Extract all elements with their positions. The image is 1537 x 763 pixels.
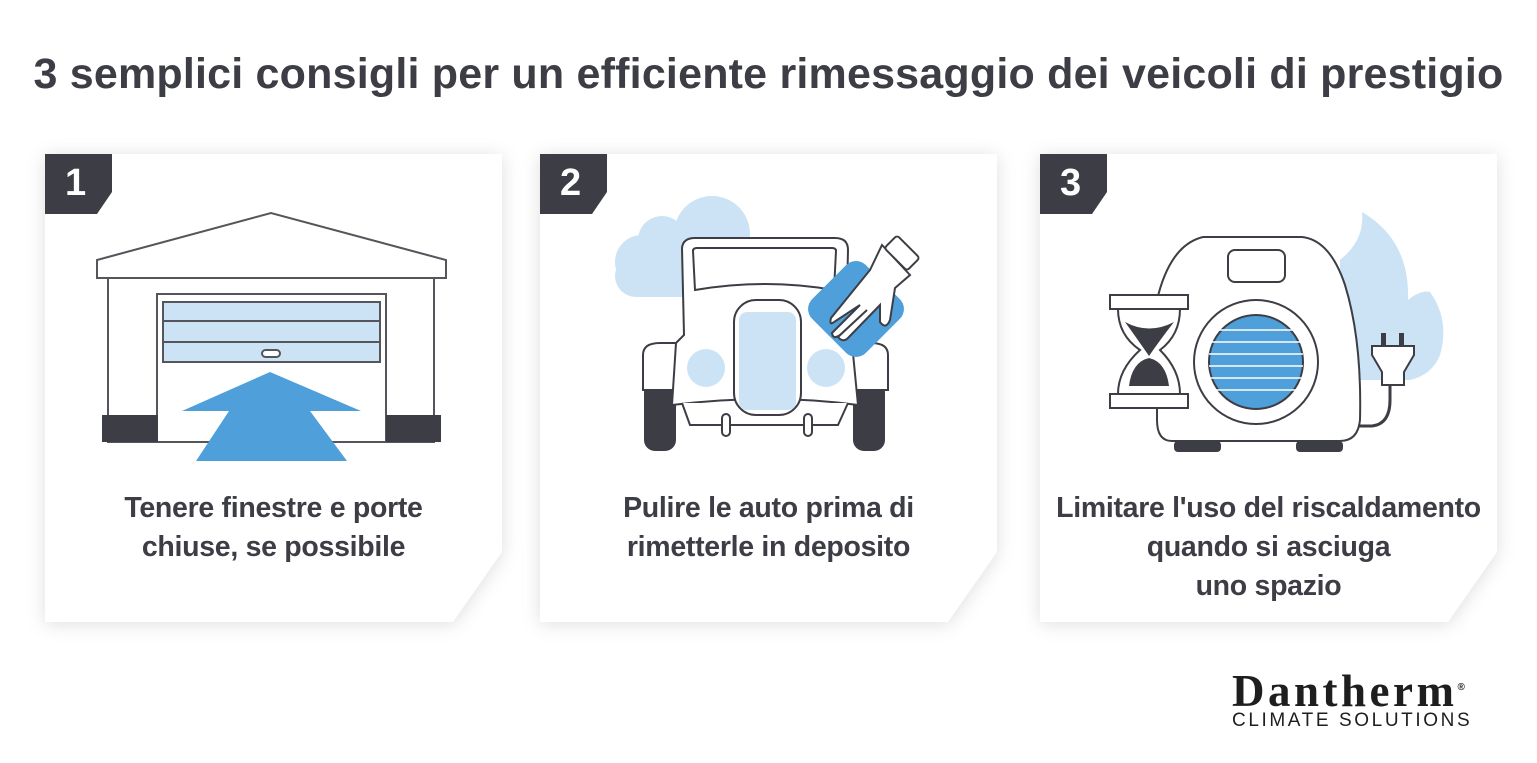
text 3: Limitare l'uso del riscaldamento	[1056, 492, 1481, 524]
icon: car being cleaned	[615, 196, 920, 451]
number tab 3: 3	[1060, 162, 1081, 204]
panel: 1 garage	[39, 150, 508, 630]
text 2: Pulire le auto prima di	[623, 492, 914, 524]
number tab 1	[45, 154, 112, 214]
panel: 2 car	[534, 150, 1003, 630]
text 1: chiuse, se possibile	[142, 531, 405, 563]
icon: garage with arrow	[96, 212, 447, 461]
number tab 2: 2	[560, 162, 581, 204]
text 3	[1058, 496, 1480, 601]
text 3: uno spazio	[1196, 570, 1341, 602]
text 1: Tenere finestre e porte	[124, 492, 423, 524]
number tab 3	[1040, 154, 1107, 214]
number tab 1: 1	[65, 162, 86, 204]
text 2	[625, 496, 912, 562]
panel: 3 heater	[1034, 150, 1503, 630]
logo: Dantherm: Dantherm®	[1232, 666, 1465, 716]
text 3: quando si asciuga	[1147, 531, 1390, 563]
number tab 2	[540, 154, 607, 214]
title: 3 semplici consigli per un efficiente rimessaggio dei veicoli di prestigio	[33, 50, 1504, 98]
text 2: rimetterle in deposito	[627, 531, 910, 563]
logo: Dantherm: CLIMATE SOLUTIONS	[1232, 710, 1472, 731]
icon: heater, hourglass and flame	[1109, 212, 1444, 452]
text 1	[124, 496, 422, 562]
